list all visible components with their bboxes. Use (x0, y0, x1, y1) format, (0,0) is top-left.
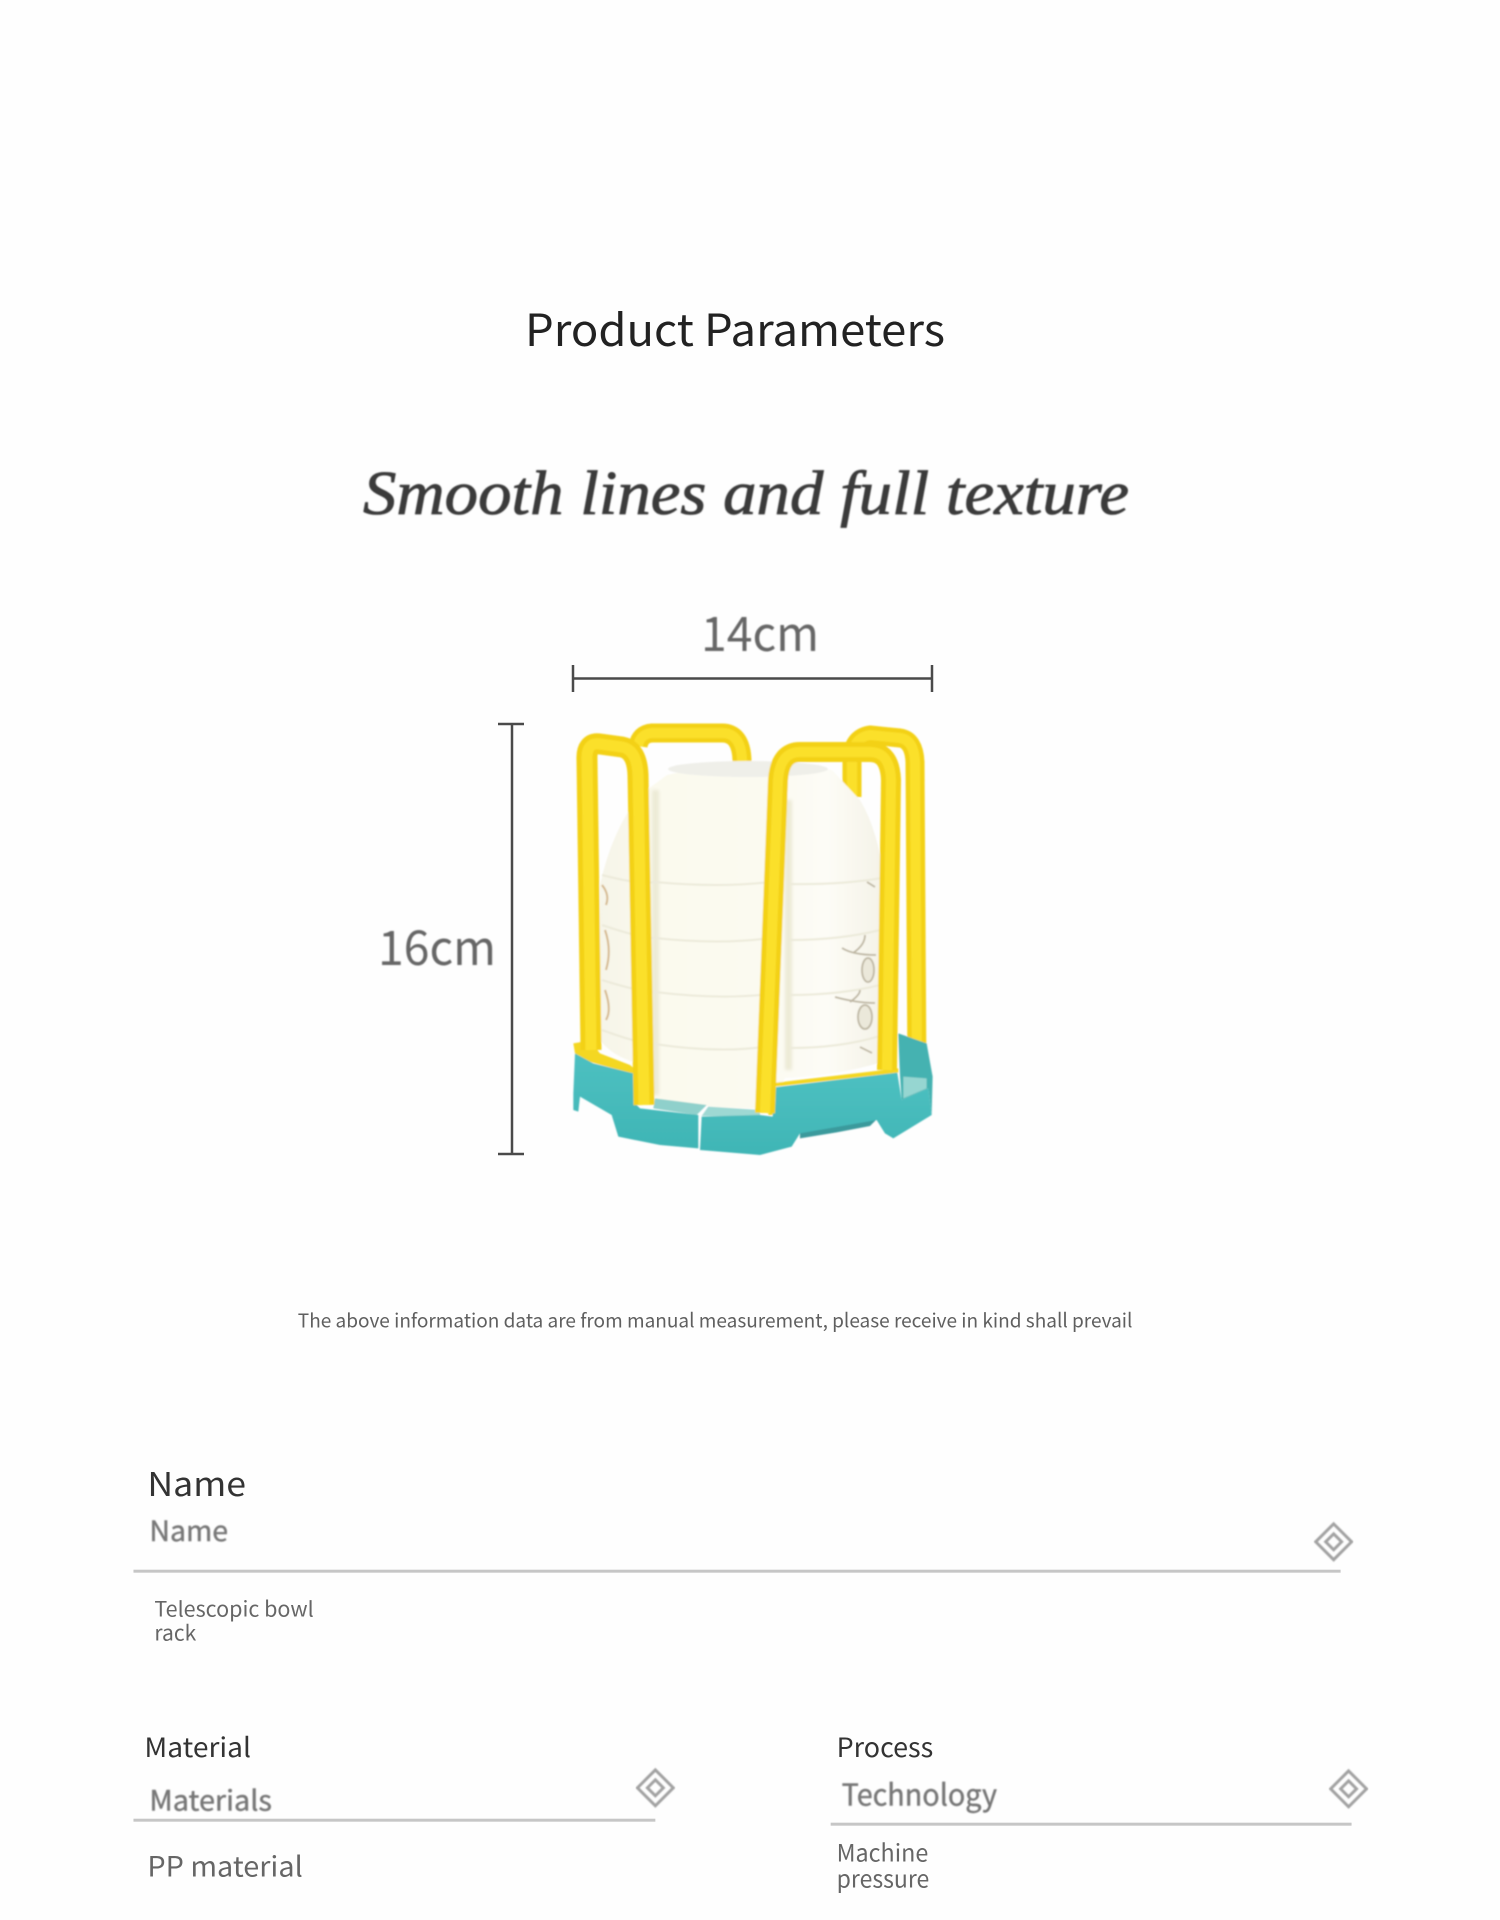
label: Technology: Technology (842, 1771, 997, 1815)
value: Telescopic bowl rack: rack (154, 1617, 197, 1647)
back yellow frames (638, 733, 917, 1075)
title: Product Parameters (525, 295, 945, 359)
measurement note: The above information data are from manual measurement, please receive in kind shall prevail (298, 1305, 1132, 1334)
divider line (831, 1823, 1352, 1826)
icon: diamond (1316, 1524, 1352, 1560)
bowl rim (668, 761, 828, 777)
width dimension: 14cm: 14cm (701, 595, 819, 665)
stacked bowls (600, 764, 884, 1108)
front base segments (573, 1042, 932, 1155)
height dimension: 16cm: 16cm (378, 909, 496, 979)
value: PP material: PP material (147, 1845, 303, 1885)
subtitle: Smooth lines and full texture (363, 460, 1129, 528)
value: Telescopic bowl rack: Telescopic bowl (154, 1594, 314, 1624)
label: Materials: Materials (149, 1780, 272, 1820)
spec: process (831, 1726, 1367, 1894)
heading: Material: Material (144, 1726, 251, 1765)
icon: diamond (637, 1770, 673, 1806)
value: Machine pressure: pressure (837, 1859, 929, 1894)
bowl leaf decoration (835, 882, 876, 1053)
divider line (133, 1819, 655, 1822)
label: Name: Name (149, 1510, 228, 1550)
height dimension: 16cm (378, 724, 524, 1154)
front yellow frames (587, 744, 891, 1113)
spec: name (133, 1459, 1352, 1647)
product photo: telescopic bowl rack (573, 733, 933, 1155)
value: Machine pressure (837, 1834, 929, 1894)
divider line (133, 1570, 1341, 1573)
value: Machine pressure: Machine (837, 1834, 928, 1869)
width dimension: 14cm (573, 595, 932, 692)
bowl rim lines (602, 875, 882, 1050)
bowl shading (652, 790, 792, 1095)
heading: Name: Name (147, 1459, 246, 1506)
back right base segment (898, 1033, 933, 1115)
value: Telescopic bowl rack (154, 1594, 314, 1647)
heading: Process: Process (837, 1726, 933, 1765)
spec: material (133, 1726, 673, 1885)
icon: diamond (1331, 1771, 1367, 1807)
